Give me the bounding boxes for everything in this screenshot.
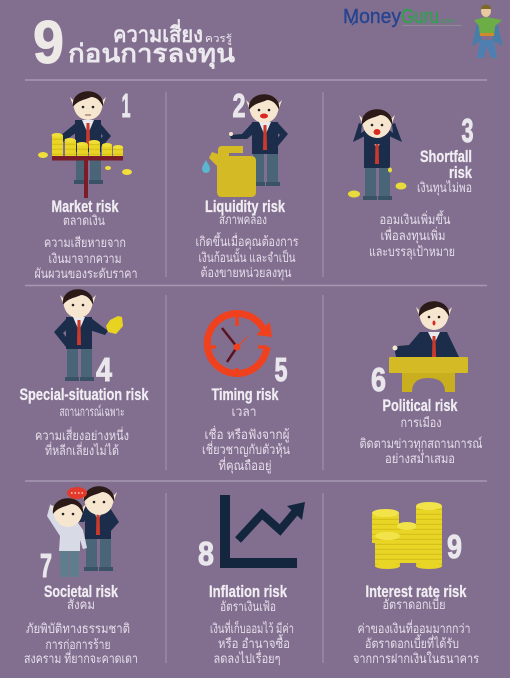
text block: liquidity risk: ต้องขายหน่วยลงทุน: [200, 265, 292, 281]
text block: political risk: การเมือง: [400, 415, 442, 430]
text block: shortfall risk: ออมเงินเพิ่มขึ้น: [380, 210, 451, 227]
text block: inflation risk: หรือ อำนาจซื้อ: [218, 634, 290, 651]
text block: special-situation risk: ความเสี่ยงอย่างหนึ่ง: [35, 427, 129, 443]
number 4: 4: [96, 351, 113, 388]
title: ควรรู้: [205, 33, 233, 45]
icon: man with empty fuel can: [202, 94, 288, 197]
text block: liquidity risk: สภาพคล่อง: [219, 212, 267, 227]
panel: 9 interest rate risk: [353, 502, 479, 666]
text block: inflation risk: เงินที่เก็บออมไว้ มีค่า: [210, 619, 294, 636]
heading: liquidity risk: Liquidity risk: [205, 197, 285, 216]
panel: 2 liquidity risk: [196, 87, 299, 281]
text block: shortfall risk: เพื่อลงทุนเพิ่ม: [380, 227, 446, 244]
heading: interest rate risk: Interest rate risk: [366, 582, 467, 601]
logo: MoneyGuru: .com: [439, 18, 455, 25]
icon: man at podium: [389, 301, 468, 392]
logo: MoneyGuru: [343, 6, 462, 28]
number 8: 8: [198, 535, 214, 572]
title: ความเสี่ยง: [113, 18, 203, 47]
panel: 8 inflation risk: [198, 495, 305, 666]
heading: timing risk: Timing risk: [212, 385, 279, 404]
panel: 4 special-situation risk: [20, 289, 149, 458]
text block: interest rate risk: [353, 595, 479, 666]
text block: inflation risk: ลดลงไปเรื่อยๆ: [214, 650, 281, 666]
text block: timing risk: เชี่ยวชาญกับตัวหุ้น: [202, 441, 290, 458]
title: ก่อนการลงทุน: [68, 40, 235, 70]
panel: 1 market risk: 1: [122, 87, 130, 124]
text block: market risk: เงินมาจากความ: [48, 251, 122, 266]
text block: shortfall risk: เงินทุนไม่พอ: [417, 180, 472, 196]
logo: MoneyGuru: Guru: [401, 6, 439, 28]
number 3: 3: [462, 112, 474, 149]
text block: special-situation risk: ที่หลีกเลี่ยงไม่ได้: [45, 442, 119, 458]
text block: interest rate risk: อัตราดอกเบี้ย: [382, 595, 446, 612]
panel: 6 political risk: [360, 301, 482, 466]
heading: shortfall risk: risk: [449, 163, 472, 182]
number 6: 6: [371, 361, 386, 398]
icon: superhero mascot: [472, 4, 503, 58]
text block: political risk: ติดตามข่าวทุกสถานการณ์: [360, 436, 482, 452]
heading: societal risk: Societal risk: [44, 582, 118, 601]
icon: man behind coin table: [38, 91, 132, 198]
text block: interest rate risk: อัตราดอกเบี้ยที่ได้รับ: [365, 634, 459, 651]
text block: inflation risk: [210, 599, 294, 666]
text block: timing risk: เวลา: [232, 404, 256, 419]
title: [33, 9, 235, 76]
icon: clock with arrow: [207, 313, 272, 377]
logo: MoneyGuru: Money: [343, 6, 401, 28]
text block: shortfall risk: [369, 180, 472, 260]
title: 9: [33, 9, 64, 76]
icon: rising line chart with arrow: [220, 495, 305, 568]
text block: societal risk: ภัยพิบัติทางธรรมชาติ: [26, 621, 130, 636]
text block: liquidity risk: [196, 212, 299, 281]
text block: market risk: ผันผวนของระดับราคา: [34, 266, 138, 281]
panel: 1 market risk: [34, 87, 138, 281]
icon: worried man with hands on head: [348, 109, 406, 200]
number 7: 7: [40, 547, 52, 584]
panel: 5 timing risk: [202, 313, 290, 474]
text block: timing risk: เชื่อ หรือฟังจากผู้: [204, 426, 290, 443]
icon: two people with speech bubble: [47, 486, 119, 577]
text block: market risk: ตลาดเงิน: [63, 213, 105, 228]
icon: man holding coins: [54, 289, 123, 381]
icon: coin stacks: [372, 502, 442, 569]
heading: shortfall risk: [420, 147, 472, 182]
panel: 7 societal risk: [24, 486, 138, 666]
heading: political risk: Political risk: [382, 396, 458, 415]
heading: market risk: Market risk: [52, 197, 119, 216]
panel: 3 shortfall risk: [348, 109, 474, 260]
text block: timing risk: ที่คุณถืออยู่: [218, 457, 272, 474]
text block: liquidity risk: เงินก้อนนั้น และจำเป็น: [198, 248, 296, 265]
text block: societal risk: สังคม: [67, 597, 95, 612]
text block: societal risk: การก่อการร้าย: [46, 637, 110, 652]
text block: timing risk: [202, 404, 290, 474]
number 5: 5: [274, 351, 288, 388]
text block: interest rate risk: ค่าของเงินที่ออมมากกว่า: [358, 620, 470, 636]
text block: market risk: ความเสียหายจาก: [44, 235, 126, 250]
heading: inflation risk: Inflation risk: [209, 582, 287, 601]
text block: liquidity risk: เกิดขึ้นเมื่อคุณต้องการ: [196, 232, 299, 250]
text block: market risk: [34, 213, 138, 281]
number 2: 2: [232, 87, 246, 124]
heading: shortfall risk: Shortfall: [420, 147, 472, 166]
text block: special-situation risk: [35, 404, 129, 458]
heading: special-situation risk: Special-situation risk: [20, 385, 149, 404]
text block: special-situation risk: สถานการณ์เฉพาะ: [60, 404, 124, 419]
text block: societal risk: [24, 597, 138, 666]
number 9: 9: [447, 528, 462, 565]
text block: shortfall risk: และบรรลุเป้าหมาย: [369, 244, 455, 260]
text block: societal risk: สงคราม ที่ยากจะคาดเดา: [24, 650, 138, 666]
text block: interest rate risk: จากการฝากเงินในธนาคาร: [353, 651, 479, 666]
text block: inflation risk: อัตราเงินเฟ้อ: [220, 599, 276, 614]
text block: political risk: อย่างสม่ำเสมอ: [385, 450, 455, 466]
text block: political risk: [360, 415, 482, 466]
